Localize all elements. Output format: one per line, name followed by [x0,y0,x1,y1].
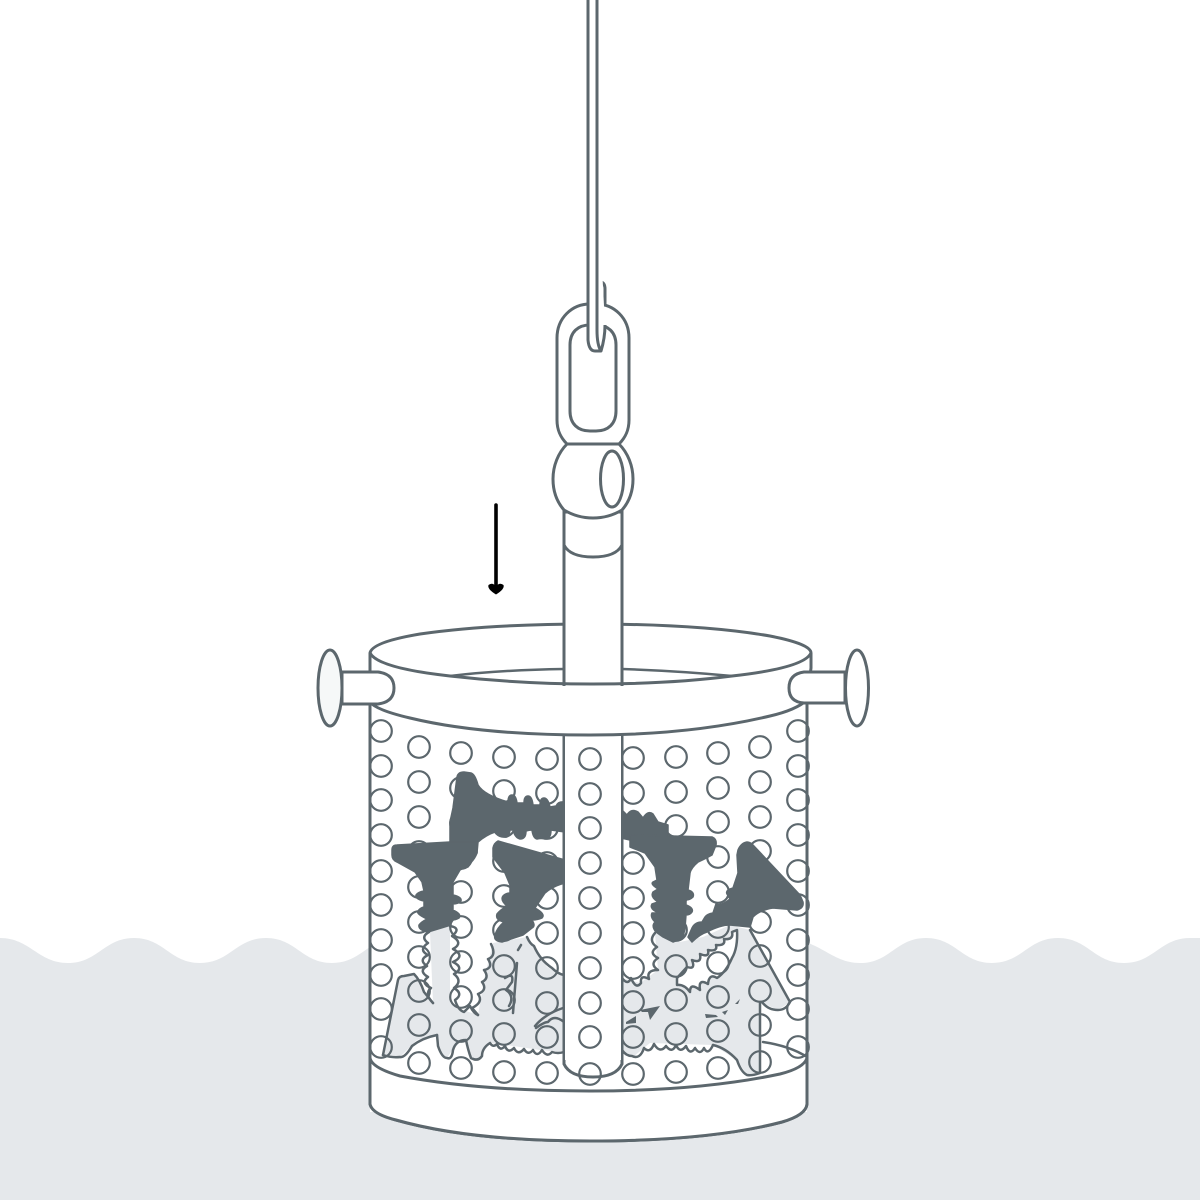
screw: horizontal top, tip beyond pole [621,809,668,840]
submerged screws, lighter right group [622,925,790,1075]
screw: tilted right [688,842,803,942]
rim front edge [370,653,811,684]
liquid surface with waves [0,938,1200,1200]
pole perforations [579,748,601,1085]
pole shaft and lifting swivel [553,304,633,686]
top rim of basket [370,624,811,735]
left handle [318,650,394,726]
swivel ball [553,444,633,518]
screw: horizontal top [450,772,565,867]
screw: upright left [392,842,477,932]
basket interior [370,655,807,1112]
swivel ball hole [600,451,624,507]
submerged screws, lighter left group [383,925,790,1075]
dark screws above the liquid [392,772,803,942]
chain link [557,304,629,444]
side walls and bottom rim [370,705,807,1141]
lifting cable and hook [588,0,605,351]
basket perforations [370,720,809,1085]
right handle [789,650,868,726]
screw: upright right [630,835,716,942]
basket [370,624,811,1141]
screw: tilted centre [493,841,565,942]
downward arrow [488,505,504,594]
centre pole [564,684,622,1077]
